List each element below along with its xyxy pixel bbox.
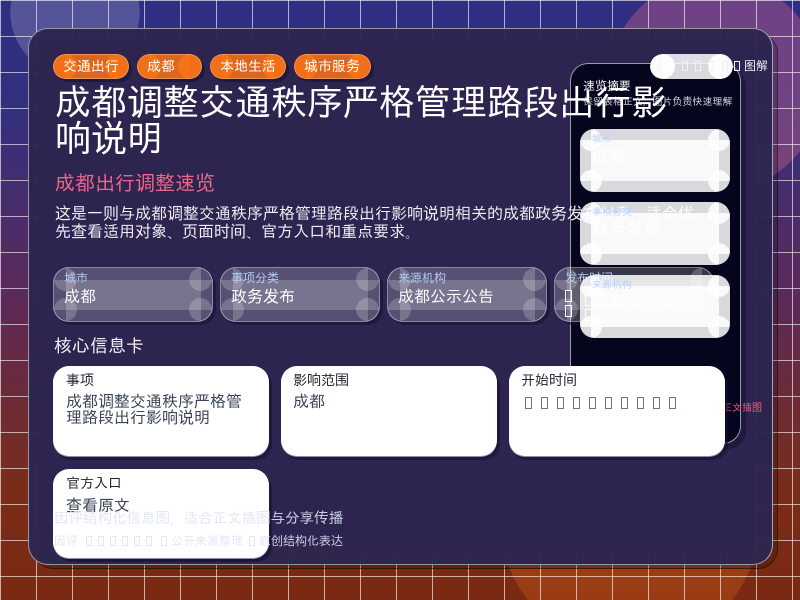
background circle: top left — [10, 0, 140, 77]
intro text: 这是一则与成都调整交通秩序严格管理路段出行影响说明相关的成都政务发布信息，适合优 — [55, 206, 694, 222]
illustration caption: 正文插图 — [722, 403, 762, 413]
title: 成都调整交通秩序严格管理路段出行影响说明 — [55, 85, 667, 157]
meta card: 城市 — [53, 267, 213, 322]
meta card: 城市: 成都 — [64, 289, 96, 305]
glass box: 事项分类: 事项分类 — [592, 207, 632, 217]
tag: 本地生活 — [210, 54, 286, 79]
tag: 本地生活: 本地生活 — [220, 60, 276, 74]
tag: 交通出行: 交通出行 — [63, 60, 119, 74]
meta card: 事项分类 — [220, 267, 380, 322]
glass box: 事项分类: 政务发布 — [592, 221, 660, 238]
glass box: 来源机构: 来源机构 — [592, 280, 632, 290]
info card: 事项 — [53, 366, 269, 456]
info card: 影响范围 — [281, 366, 497, 456]
glass box: 城市: 城市 — [592, 134, 612, 144]
top right label — [682, 60, 768, 72]
top right label: 图解 — [744, 60, 768, 72]
glass box: 来源机构: 成都公示公告 — [592, 294, 694, 311]
info card: 事项: 事项 — [66, 374, 94, 388]
glass box: 城市: 成都 — [592, 148, 626, 165]
top right pill — [650, 54, 733, 79]
meta card: 事项分类: 事项分类 — [231, 272, 279, 284]
info card: 影响范围: 成都 — [293, 394, 325, 410]
glass box: 事项分类 — [580, 202, 730, 265]
background circle: bottom — [500, 390, 760, 600]
info card: 事项: 成都调整交通秩序严格管理路段出行影响说明 — [66, 394, 242, 426]
meta card: 来源机构: 来源机构 — [398, 272, 446, 284]
tag: 成都 — [137, 54, 202, 79]
tag: 城市服务 — [294, 54, 371, 79]
tag: 交通出行 — [53, 54, 129, 79]
info card: 开始时间 — [509, 366, 725, 456]
tag: 城市服务: 城市服务 — [304, 60, 360, 74]
summary note: 保留表格正文，图片负责快速理解 — [583, 97, 732, 107]
summary heading: 速览摘要 — [583, 80, 631, 92]
footer line two: 因评 公开来源整理 原创结构化表达 — [54, 535, 343, 547]
info card: 官方入口 — [53, 469, 269, 558]
meta card: 事项分类: 政务发布 — [231, 289, 295, 305]
glass box: 来源机构 — [580, 275, 730, 338]
meta card: 发布时间: 发布时间 — [565, 272, 613, 284]
background circle: top right — [607, 0, 800, 193]
intro text: 先查看适用对象、页面时间、官方入口和重点要求。 — [55, 224, 420, 240]
info card: 开始时间: 开始时间 — [521, 374, 577, 388]
meta card: 来源机构 — [387, 267, 547, 322]
info card: 官方入口: 官方入口 — [66, 477, 122, 491]
meta card: 城市: 城市 — [64, 272, 88, 284]
info card: 官方入口: 查看原文 — [66, 498, 130, 514]
glass box: 城市 — [580, 129, 730, 192]
footer line one: 因评结构化信息图，适合正文插图与分享传播 — [54, 512, 343, 526]
info card: 影响范围: 影响范围 — [293, 374, 349, 388]
subtitle: 成都出行调整速览 — [55, 173, 215, 193]
panel: quick summary backdrop — [570, 63, 741, 444]
section heading: 核心信息卡 — [54, 337, 144, 355]
meta card: 发布时间 — [554, 267, 714, 322]
tag: 成都: 成都 — [147, 60, 175, 74]
meta card: 来源机构: 成都公示公告 — [398, 289, 494, 305]
intro text — [55, 205, 694, 240]
